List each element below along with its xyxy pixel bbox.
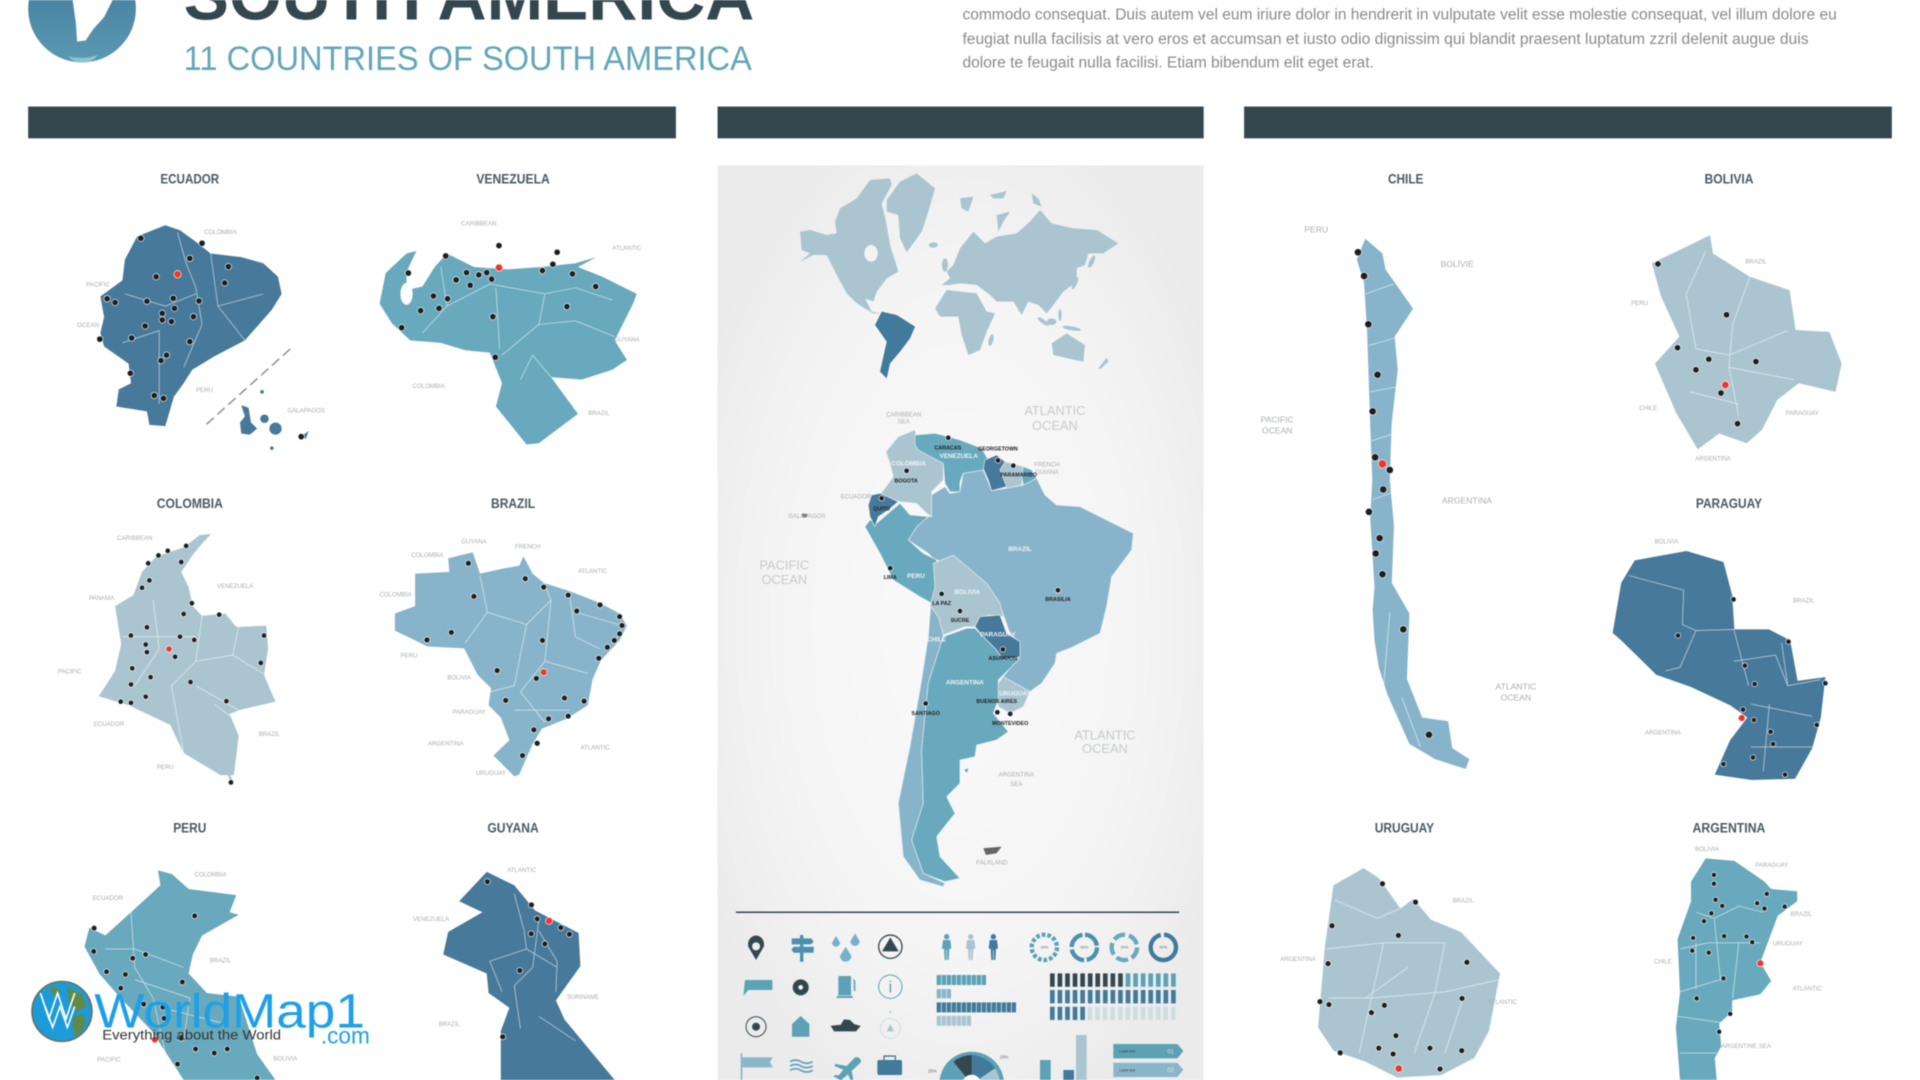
panel: Venezuela: CARIBBEAN <box>461 220 496 227</box>
panel: Venezuela: COLOMBIA <box>412 383 446 390</box>
South America labels: PARAMARIBO <box>1000 472 1037 478</box>
horizontal bar chart <box>937 980 1017 1021</box>
South America labels: BRASILIA <box>1045 597 1071 603</box>
icon: target <box>746 1017 766 1037</box>
panel: Argentina: PARAGUAY <box>1755 862 1788 869</box>
panel: Bolivia: PERU <box>1631 300 1648 307</box>
icon: disc <box>793 979 809 995</box>
panel: Ecuador: GALAPAGOS <box>287 408 325 415</box>
South America labels: GUIANA <box>1035 469 1060 476</box>
panel: Argentina: URUGUAY <box>1773 940 1803 947</box>
icon: info <box>879 975 902 998</box>
panel: Brazil: PERU <box>400 653 417 660</box>
icon: info: i <box>889 978 892 997</box>
South America labels: SANTIAGO <box>912 711 940 717</box>
donut chart 2: 50% <box>1080 945 1089 950</box>
panel: Brazil: FRENCH <box>515 544 540 551</box>
icon: ship <box>831 1019 861 1031</box>
panel: Argentina: CHILE <box>1654 959 1672 966</box>
panel: Uruguay <box>1280 820 1518 1078</box>
watermark domain: .com <box>321 1022 370 1048</box>
panel: Colombia: COLOMBIA <box>157 495 223 511</box>
panel: Bolivia: CHILE <box>1639 405 1657 412</box>
column chart <box>1040 1035 1087 1080</box>
panel: Paraguay <box>1613 495 1828 780</box>
South America labels: PERU <box>907 573 925 580</box>
icon: waves <box>790 1060 813 1072</box>
South America labels: LIMA <box>884 575 897 581</box>
panel: Chile: ATLANTIC <box>1496 681 1536 691</box>
panel: Brazil <box>379 495 627 777</box>
arrow label 1 <box>1113 1044 1183 1058</box>
donut chart 4 <box>1151 935 1176 960</box>
panel: Peru: ECUADOR <box>92 895 124 902</box>
icon: house <box>792 1016 809 1037</box>
South America labels: CARIBBEAN <box>886 411 921 418</box>
panel: Peru: BOLIVIA <box>273 1055 298 1062</box>
icon: signpost <box>791 935 814 962</box>
panel: Ecuador <box>77 171 325 450</box>
South America map <box>802 430 1133 887</box>
donut chart 2 <box>1072 935 1097 960</box>
South America labels: FALKLAND <box>976 859 1008 866</box>
panel: Chile: OCEAN <box>1501 692 1531 702</box>
panel: center map background <box>718 165 1204 1080</box>
people pictogram chart <box>1050 980 1179 1013</box>
panel: Bolivia: BRAZIL <box>1745 258 1767 265</box>
panel: Bolivia: PARAGUAY <box>1786 410 1819 417</box>
South America labels: FRENCH <box>1034 462 1060 469</box>
South America labels: ARGENTINA <box>946 679 984 686</box>
panel: Guyana: BRAZIL <box>439 1021 461 1028</box>
panel: Venezuela: VENEZUELA <box>476 171 550 187</box>
intro text block <box>962 6 1837 71</box>
pie chart <box>928 1052 1008 1080</box>
intro text block: dolore te feugait nulla facilisi. Etiam bibendum elit eget erat. <box>962 53 1374 71</box>
panel: Argentina: ARGENTINE SEA <box>1721 1043 1772 1050</box>
South America labels: VENEZUELA <box>940 453 978 460</box>
panel: Argentina: ATLANTIC <box>1793 986 1822 993</box>
South America labels: BOGOTA <box>895 478 918 484</box>
South America highlight on world map <box>875 312 915 378</box>
panel: Brazil: BRAZIL <box>491 495 535 511</box>
watermark wordmark: WorldMap1 <box>94 985 365 1038</box>
donut chart 1: 30% <box>1040 945 1049 950</box>
intro text block: commodo consequat. Duis autem vel eum iriure dolor in hendrerit in vulputate velit esse molestie consequat, vel illum dolore eu <box>962 6 1837 24</box>
South America labels: ASUNCION <box>989 656 1017 662</box>
globe logo icon <box>28 0 136 63</box>
icon: water drops <box>832 933 860 962</box>
South America labels: URUGUAY <box>999 691 1032 698</box>
panel: Brazil: GUYANA <box>461 539 487 546</box>
panel: Peru: BRAZIL <box>210 957 232 964</box>
panel: Brazil: COLOMBIA <box>411 552 444 559</box>
panel: Bolivia: BOLIVIA <box>1704 171 1753 187</box>
icon: plane <box>833 1057 861 1080</box>
panel: Paraguay: BRAZIL <box>1793 597 1815 604</box>
panel: Peru: PERU <box>173 820 206 836</box>
South America labels: ATLANTIC <box>1074 728 1136 743</box>
panel: Peru: COLOMBIA <box>194 872 228 879</box>
header bar: right <box>1244 107 1892 138</box>
watermark tagline: Everything about the World <box>102 1027 281 1043</box>
donut chart 3: 70% <box>1120 945 1129 950</box>
South America labels: SUCRE <box>951 618 970 624</box>
South America labels: SEA <box>1010 781 1023 788</box>
panel: Brazil: BOLIVIA <box>447 675 472 682</box>
icon: fuel pump <box>837 976 855 998</box>
panel: Brazil: URUGUAY <box>476 770 506 777</box>
panel: Colombia: PANAMA <box>89 595 115 602</box>
panel: Ecuador: OCEAN <box>77 322 99 329</box>
donut chart 4: 90% <box>1159 945 1168 950</box>
South America labels: BRAZIL <box>1008 546 1032 553</box>
South America labels: OCEAN <box>1032 418 1078 433</box>
panel: Brazil: PARAGUAY <box>452 709 486 716</box>
panel: Colombia: BRAZIL <box>259 731 281 738</box>
panel: Colombia: PERU <box>157 764 174 771</box>
icon: person dark <box>989 934 998 960</box>
icon: map pin <box>748 936 764 960</box>
panel: Brazil: COLOMBIA <box>379 591 413 598</box>
header bar: left <box>28 107 676 138</box>
icon: warning <box>879 935 902 958</box>
watermark globe <box>32 981 92 1041</box>
panel: Guyana: ATLANTIC <box>507 867 537 874</box>
header bar: center <box>718 107 1204 138</box>
South America labels: GALAPAGOS <box>788 513 826 520</box>
world map <box>800 173 1118 378</box>
panel: Guyana <box>413 820 615 1080</box>
pie chart: 25% <box>928 1069 937 1074</box>
arrow label 2 <box>1113 1063 1183 1077</box>
donut chart 1 <box>1032 935 1057 960</box>
arrow label 2: Lorem text <box>1119 1068 1135 1072</box>
panel: Peru: PACIFIC <box>97 1057 121 1064</box>
panel: Bolivia: ARGENTINA <box>1695 455 1732 462</box>
panel: Argentina: BRAZIL <box>1791 911 1813 918</box>
panel: Uruguay: ATLANTIC <box>1488 999 1518 1006</box>
panel: Venezuela <box>380 171 642 444</box>
donut chart 3 <box>1112 935 1137 960</box>
panel: Colombia: CARIBBEAN <box>117 535 152 542</box>
panel: Chile: BOLÍVIE <box>1440 259 1474 269</box>
South America labels: PACIFIC <box>759 557 809 572</box>
South America labels: OCEAN <box>1082 741 1128 756</box>
panel: Colombia: PACIFIC <box>58 668 82 675</box>
arrow label 2: 02 <box>1167 1068 1175 1074</box>
panel: Paraguay: ARGENTINA <box>1645 730 1682 737</box>
panel: Colombia: ECUADOR <box>94 721 125 728</box>
pie chart: 15% <box>1000 1055 1008 1060</box>
panel: Brazil: ATLANTIC <box>581 744 610 751</box>
panel: Bolivia <box>1631 171 1842 462</box>
South America labels: QUITO <box>873 507 890 513</box>
South America labels: CARACAS <box>934 445 962 451</box>
panel: Argentina <box>1654 820 1822 1080</box>
panel: Ecuador: COLOMBIA <box>204 229 237 236</box>
South America labels: ECUADOR <box>841 493 872 500</box>
panel: Ecuador: PACIFIC <box>86 282 110 289</box>
panel: Venezuela: GUYANA <box>614 337 641 344</box>
South America labels: OCEAN <box>761 572 807 587</box>
panel: Brazil: ARGENTINA <box>428 741 464 748</box>
panel: Argentina: BOLIVIA <box>1695 846 1720 853</box>
South America labels: GEORGETOWN <box>978 447 1018 453</box>
panel: Guyana: VENEZUELA <box>413 916 450 923</box>
panel: Venezuela: ATLANTIC <box>612 245 642 252</box>
panel: Paraguay: BOLIVIA <box>1655 539 1679 546</box>
intro text block: feugiat nulla facilisis at vero eros et accumsan et iusto odio dignissim qui blandit praesent luptatum zzril delenit augue duis <box>962 30 1809 48</box>
South America labels: MONTEVIDEO <box>992 721 1028 727</box>
panel: Colombia <box>58 495 281 785</box>
South America labels: SEA <box>898 419 911 426</box>
icon: person light <box>966 934 975 960</box>
icon: person teal <box>942 934 951 960</box>
panel: Chile: PERU <box>1304 225 1328 235</box>
South America labels: ARGENTINA <box>998 771 1035 778</box>
panel: Chile: OCEAN <box>1262 425 1292 435</box>
panel: Brazil: ATLANTIC <box>578 568 608 575</box>
icon: suitcase <box>877 1056 902 1075</box>
South America labels: ATLANTIC <box>1024 403 1085 418</box>
arrow label 1: 01 <box>1167 1049 1175 1055</box>
icon: speech flag <box>743 980 772 996</box>
South America labels: BUENOS AIRES <box>976 699 1018 705</box>
panel: Chile <box>1261 171 1536 769</box>
South America labels: LA PAZ <box>932 601 952 607</box>
panel: Chile: CHILE <box>1388 171 1423 187</box>
panel: Chile: PACIFIC <box>1261 414 1294 424</box>
watermark logo <box>32 981 370 1048</box>
subtitle: 11 COUNTRIES OF SOUTH AMERICA <box>184 40 752 78</box>
icon: flag <box>741 1053 773 1080</box>
divider line <box>736 911 1179 913</box>
South America labels: COLOMBIA <box>891 460 926 467</box>
panel: Argentina: ARGENTINA <box>1693 820 1765 836</box>
panel: Uruguay: ARGENTINA <box>1280 956 1317 963</box>
panel: Uruguay: URUGUAY <box>1375 820 1435 836</box>
South America labels: BOLIVIA <box>954 589 981 596</box>
panel: Colombia: VENEZUELA <box>217 583 254 590</box>
panel: Guyana: SURINAME <box>567 994 599 1001</box>
South America labels: CHILE <box>927 637 946 644</box>
panel: Peru <box>84 820 298 1080</box>
panel: Chile: ARGENTINA <box>1442 495 1492 505</box>
South America labels <box>759 403 1136 866</box>
panel: Paraguay: PARAGUAY <box>1696 495 1763 511</box>
arrow label 1: Lorem text <box>1119 1050 1135 1054</box>
South America labels: PARAGUAY <box>980 632 1016 639</box>
panel: Guyana: GUYANA <box>487 820 539 836</box>
panel: Ecuador: PERU <box>196 387 213 394</box>
panel: Venezuela: BRAZIL <box>588 410 610 417</box>
panel: Uruguay: BRAZIL <box>1453 897 1475 904</box>
panel: Ecuador: ECUADOR <box>160 171 219 187</box>
icons and chart set <box>741 933 1183 1080</box>
icon: compass <box>880 1011 900 1038</box>
